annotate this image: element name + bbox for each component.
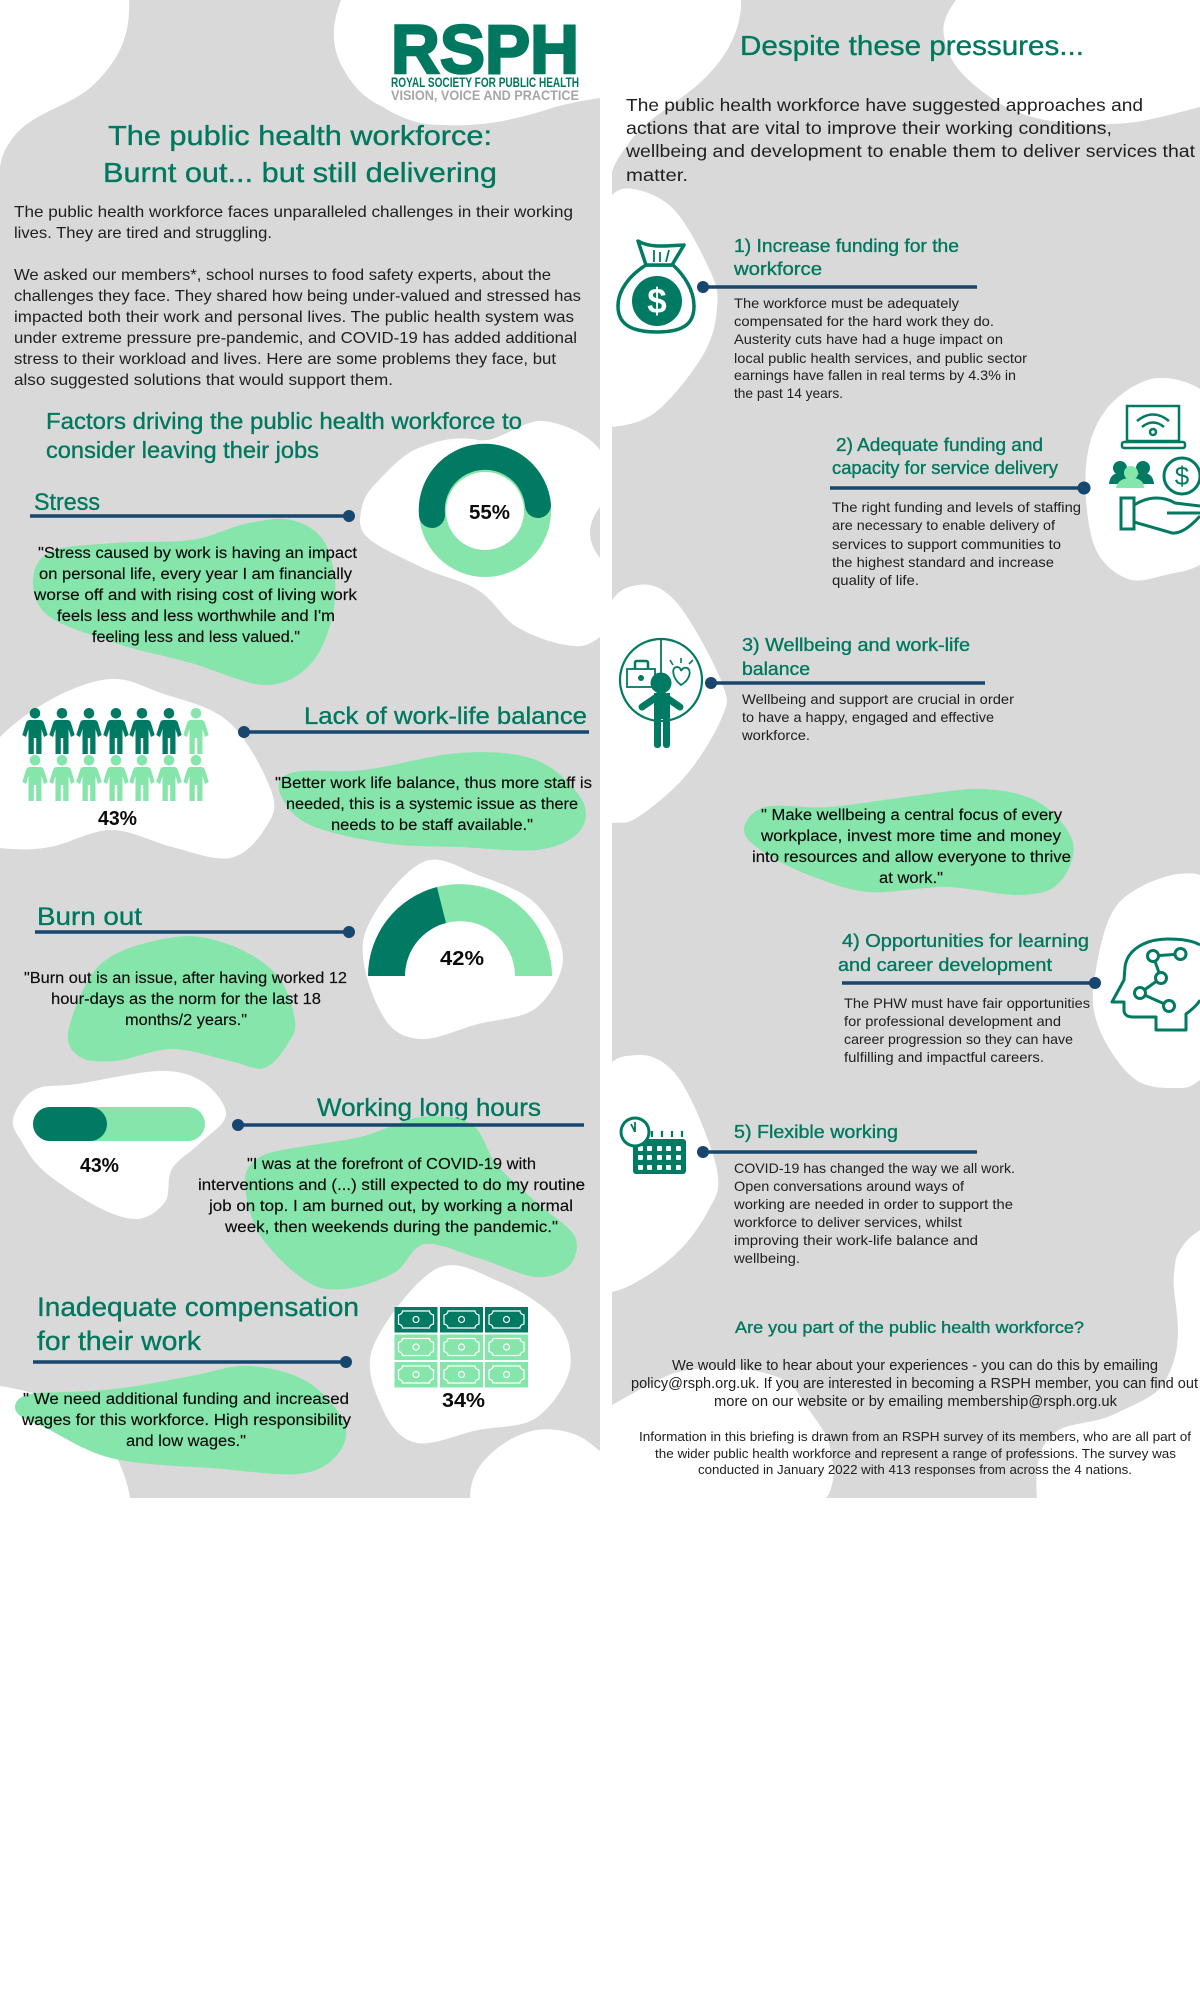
intro text: also suggested solutions that would support them. [14,372,393,389]
quote: compensation: wages for this workforce. High responsibility [21,1412,351,1429]
connector line [33,1356,352,1368]
intro text [14,204,581,389]
quote: wellbeing: workplace, invest more time and money [760,828,1061,845]
heading: stress: Stress [34,489,100,516]
body text: 1: earnings have fallen in real terms by 4.3% in [734,367,1016,383]
body text: 5: workforce to deliver services, whilst [733,1214,962,1230]
section: burn out [24,860,563,1069]
connector line [30,510,355,522]
body text: 2 [832,499,1081,588]
intro text: impacted both their work and personal lives. The public health system was [14,309,574,326]
call to action [631,1318,1198,1477]
donut chart: 55%: 55% [469,502,510,524]
icon: laptop, people, money in hand [1109,406,1200,533]
section: 5 flexible working [612,1055,1015,1292]
quote: burn out: hour-days as the norm for the last 18 [51,991,321,1008]
heading: 3: 3) Wellbeing and work-life [742,634,970,655]
logo: RSPH: RSPH [391,11,579,88]
section: 4 opportunities [838,873,1200,1088]
body text: 1 [734,295,1027,401]
body text: 1: local public health services, and public sector [734,350,1027,366]
body text: 4: fulfilling and impactful careers. [844,1049,1044,1065]
white blob behind donut [360,421,600,646]
right intro text: actions that are vital to improve their working conditions, [626,118,1112,138]
body text: 5: Open conversations around ways of [734,1178,964,1194]
section: lack of work-life balance [0,679,592,859]
quote: stress [33,519,358,685]
connector line [35,926,355,938]
quote: stress: feels less and less worthwhile and I'm [57,608,335,625]
heading: 4: 4) Opportunities for learning [842,930,1089,951]
heading: 2: capacity for service delivery [832,458,1058,478]
heading: inadequate compensation [37,1292,359,1356]
heading: burn out: Burn out [37,903,142,931]
intro text: The public health workforce faces unparalleled challenges in their working [14,204,573,221]
quote: work-life balance: "Better work life balance, thus more staff is [275,775,592,792]
heading: despite these pressures: Despite these pressures... [740,30,1084,61]
logo: RSPH: ROYAL SOCIETY FOR PUBLIC HEALTH [391,74,579,90]
body text: 5: improving their work-life balance and [734,1232,978,1248]
survey footnote: conducted in January 2022 with 413 responses from across the 4 nations. [698,1462,1132,1477]
progress bar: 43%: 43% [80,1155,119,1177]
body text: 2: the highest standard and increase [832,554,1054,570]
title: The public health workforce: [108,120,492,151]
body text: 4: career progression so they can have [844,1031,1073,1047]
section: working long hours [13,1071,585,1289]
stat: 43%: 43% [98,808,137,830]
subheading: factors [46,408,522,463]
intro text: stress to their workload and lives. Here are some problems they face, but [14,351,557,368]
logo: RSPH: VISION, VOICE AND PRACTICE [391,88,579,103]
connector line [842,977,1101,989]
intro text: lives. They are tired and struggling. [14,225,272,242]
white blob behind people [0,679,274,859]
heading: 1 [733,236,959,279]
section: stress [30,408,600,685]
quote: wellbeing: into resources and allow everyone to thrive [752,849,1071,866]
panel: left grey background [0,0,600,1498]
donut chart: 55% [432,457,538,564]
heading: 3 [742,634,970,679]
pictogram: banknotes 3 of 9 [394,1307,528,1388]
quote: stress: feeling less and less valued." [92,629,300,646]
quote: work-life balance: needs to be staff available." [331,817,533,834]
white blob behind gauge [363,860,563,1039]
connector line [697,1146,977,1158]
quote: working long hours: job on top. I am burned out, by working a normal [208,1198,573,1215]
icon: laptop, people, money in hand: $ [1175,461,1190,491]
title [103,120,497,188]
heading: 1: workforce [733,259,822,279]
white blob behind head icon [1093,873,1200,1088]
survey footnote [639,1429,1191,1477]
quote: working long hours: "I was at the forefront of COVID-19 with [247,1156,536,1173]
quote: stress: worse off and with rising cost of living work [33,587,357,604]
quote: work-life balance [275,752,592,851]
body text: 5: COVID-19 has changed the way we all work. [734,1160,1015,1176]
stat: 34%: 34% [442,1390,485,1412]
contact text: more on our website or by emailing membership@rsph.org.uk [714,1394,1118,1410]
quote: wellbeing: " Make wellbeing a central focus of every [761,807,1062,824]
quote: working long hours [198,1116,585,1289]
survey footnote: the wider public health workforce and represent a range of professions. The survey was [655,1446,1177,1461]
icon: head with network [1112,939,1200,1030]
heading: working long hours: Working long hours [317,1094,541,1122]
survey footnote: Information in this briefing is drawn from an RSPH survey of its members, who are all part of [639,1429,1191,1444]
heading: 5: 5) Flexible working [734,1121,898,1142]
body text: 3: to have a happy, engaged and effective [742,709,994,725]
white blob behind calendar icon [612,1055,718,1292]
white blob behind banknotes [370,1265,571,1443]
intro text: We asked our members*, school nurses to food safety experts, about the [14,267,551,284]
body text: 2: are necessary to enable delivery of [832,517,1055,533]
body text: 1: Austerity cuts have had a huge impact on [734,331,1003,347]
quote: working long hours: week, then weekends during the pandemic." [224,1219,558,1236]
gauge chart: 42% [368,884,552,976]
body text: 3: workforce. [741,727,810,743]
heading: 1: 1) Increase funding for the [734,236,959,256]
section: 1 increase funding [612,188,1027,427]
quote: compensation: " We need additional funding and increased [23,1391,349,1408]
white blob behind wellbeing icon [612,585,727,823]
quote: compensation: and low wages." [126,1433,246,1450]
progress bar: 43% [33,1107,205,1177]
contact text: policy@rsph.org.uk. If you are interested in becoming a RSPH member, you can find out [631,1376,1198,1392]
quote: work-life balance: needed, this is a systemic issue as there [286,796,578,813]
white blob behind bar [13,1071,226,1219]
connector line [232,1119,584,1131]
body text: 1: The workforce must be adequately [734,295,959,311]
heading: are you part of the workforce: Are you part of the public health workforce? [735,1318,1084,1337]
section: inadequate compensation [15,1265,571,1474]
subheading: factors: consider leaving their jobs [46,437,319,463]
heading: lack of work-life balance: Lack of work-life balance [304,703,587,730]
body text: 2: The right funding and levels of staffing [832,499,1081,515]
icon: clock and calendar [620,1116,686,1174]
heading: inadequate compensation: Inadequate compensation [37,1292,359,1322]
intro text: challenges they face. They shared how being under-valued and stressed has [14,288,581,305]
gauge chart: 42%: 42% [440,948,484,970]
heading: 4 [838,930,1089,975]
body text: 5: wellbeing. [733,1250,800,1266]
body text: 1: the past 14 years. [734,385,843,401]
connector line [830,482,1090,494]
icon: person with work and heart [620,639,702,748]
title: Burnt out... but still delivering [103,157,497,188]
connector line [697,281,977,293]
contact text: We would like to hear about your experiences - you can do this by emailing [672,1358,1158,1374]
quote: wellbeing: at work." [879,870,943,887]
contact text [631,1358,1198,1410]
heading: inadequate compensation: for their work [37,1326,202,1356]
connector line [705,677,985,689]
connector line [238,726,589,738]
quote: wellbeing [744,789,1074,895]
quote: burn out [24,936,347,1069]
quote: stress: on personal life, every year I am financially [39,566,352,583]
body text: 3 [741,691,1014,743]
quote: stress: "Stress caused by work is having an impact [38,545,358,562]
quote: burn out: "Burn out is an issue, after having worked 12 [24,970,347,987]
body text: 4 [844,995,1090,1065]
quote: compensation [15,1366,351,1474]
body text: 3: Wellbeing and support are crucial in order [742,691,1014,707]
icon: money bag: $ [647,282,667,321]
heading: 3: balance [742,658,810,679]
pictogram: people 6 of 14 [22,708,209,801]
body text: 4: for professional development and [844,1013,1061,1029]
heading: 2: 2) Adequate funding and [836,435,1043,455]
panel: right grey background [612,0,1200,1498]
right intro text [625,95,1195,185]
subheading: factors: Factors driving the public health workforce to [46,408,522,434]
heading: 4: and career development [838,954,1052,975]
body text: 2: services to support communities to [832,536,1061,552]
right intro text: matter. [626,165,688,185]
body text: 5: working are needed in order to support the [733,1196,1013,1212]
body text: 5 [733,1160,1015,1266]
quote: working long hours: interventions and (...) still expected to do my routine [198,1177,585,1194]
body text: 2: quality of life. [832,572,919,588]
white blob behind service icons [1085,378,1200,580]
heading: 2 [832,435,1058,478]
intro text: under extreme pressure pre-pandemic, and COVID-19 has added additional [14,330,577,347]
right intro text: wellbeing and development to enable them to deliver services that [625,141,1195,161]
section: 3 wellbeing [612,585,1074,895]
white blob behind money bag [612,188,717,427]
body text: 1: compensated for the hard work they do. [734,313,994,329]
body text: 4: The PHW must have fair opportunities [844,995,1090,1011]
icon: money bag [618,241,694,332]
quote: burn out: months/2 years." [125,1012,247,1029]
right intro text: The public health workforce have suggested approaches and [626,95,1143,115]
section: 2 adequate funding [830,378,1200,588]
